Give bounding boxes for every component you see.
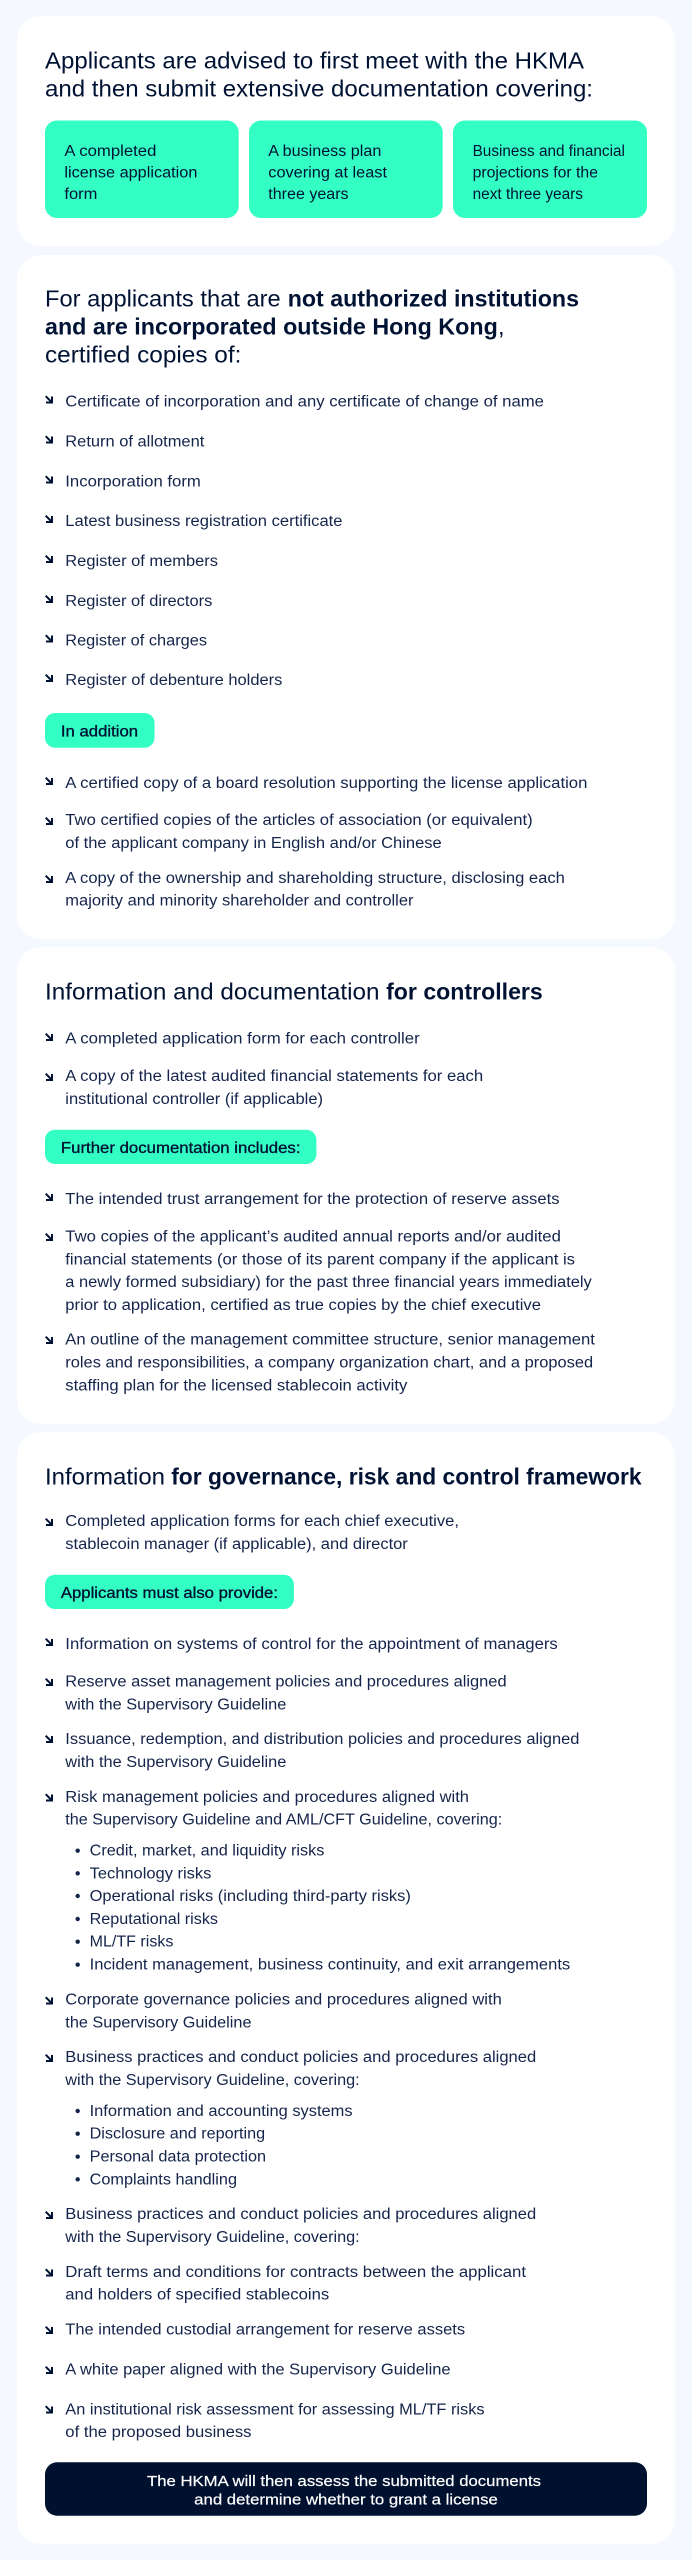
- list: additional documents: [46, 775, 587, 910]
- list: policies and procedures: Reserve asset management policies and procedures aligned: [65, 1674, 507, 1691]
- list: policies and procedures: the Supervisory Guideline and AML/CFT Guideline, covering:: [65, 1812, 502, 1829]
- list: remaining documents: with the Supervisory Guideline, covering:: [64, 2229, 360, 2246]
- panel: applicants incorporated outside Hong Kong: [17, 255, 675, 939]
- list: controller documents: A copy of the latest audited financial statements for each: [65, 1068, 483, 1085]
- list: remaining documents: Business practices and conduct policies and procedures aligned: [65, 2206, 536, 2223]
- panel: controllers: [17, 947, 675, 1424]
- list: certified copies: Register of debenture holders: [65, 672, 283, 689]
- list: further documents: The intended trust arrangement for the protection of reserve assets: [65, 1191, 560, 1208]
- list: further documents: [46, 1191, 596, 1394]
- list: certified copies: Register of directors: [65, 593, 213, 610]
- box: license application form: [45, 120, 239, 218]
- list: policies and procedures: with the Supervisory Guideline: [64, 1696, 286, 1713]
- sub-list: business practice topics: Information and accounting systems: [90, 2103, 353, 2120]
- list: certified copies: Return of allotment: [65, 434, 205, 450]
- heading: overview: and then submit extensive documentation covering:: [45, 75, 593, 101]
- list: governance and conduct policies: the Supervisory Guideline: [65, 2014, 252, 2031]
- box: financial projections: next three years: [473, 186, 583, 203]
- list: certified copies: Latest business registration certificate: [65, 513, 343, 530]
- callout: HKMA assessment: The HKMA will then assess the submitted documents: [147, 2473, 541, 2490]
- sub-list: business practice topics: Personal data protection: [90, 2149, 266, 2166]
- heading: overview: Applicants are advised to first meet with the HKMA: [45, 47, 584, 73]
- list: certified copies: Register of members: [65, 553, 218, 570]
- sub-list: risk types: Incident management, business continuity, and exit arrangements: [90, 1957, 570, 1974]
- list: policies and procedures: [46, 1636, 579, 1829]
- heading: non-authorized applicants: and are incorporated outside Hong Kong: [45, 313, 498, 339]
- pill: further documentation: Further documentation includes:: [61, 1140, 301, 1157]
- heading: controllers: Information and documentation: [45, 978, 380, 1004]
- pill: applicants must also provide: [45, 1575, 294, 1609]
- panel: governance, risk and control framework: [17, 1432, 675, 2544]
- callout: HKMA assessment: and determine whether to grant a license: [194, 2492, 498, 2508]
- list: further documents: roles and responsibilities, a company organization chart, and a proposed: [65, 1355, 593, 1372]
- heading: non-authorized applicants: [45, 285, 579, 367]
- list: application forms: Completed application forms for each chief executive,: [65, 1513, 459, 1530]
- list: controller documents: [46, 1031, 483, 1108]
- list: certified copies: Certificate of incorporation and any certificate of change of name: [65, 394, 544, 410]
- panel: documentation overview: [17, 16, 675, 246]
- list: controller documents: institutional controller (if applicable): [65, 1091, 323, 1108]
- list: governance and conduct policies: [46, 1992, 536, 2089]
- heading: overview: [45, 47, 593, 101]
- sub-list: business practice topics: Complaints handling: [90, 2171, 237, 2188]
- box: financial projections: projections for the: [473, 164, 598, 182]
- sub-list: risk types: [76, 1843, 570, 1974]
- list: further documents: staffing plan for the licensed stablecoin activity: [65, 1377, 408, 1394]
- list: governance and conduct policies: Business practices and conduct policies and procedures aligned: [65, 2049, 536, 2066]
- list: additional documents: of the applicant company in English and/or Chinese: [65, 835, 442, 852]
- list: additional documents: A certified copy of a board resolution supporting the license application: [65, 775, 587, 792]
- heading: governance: Information: [45, 1463, 165, 1489]
- list: further documents: financial statements (or those of its parent company if the applicant is: [65, 1251, 575, 1268]
- pill: in addition: In addition: [61, 724, 138, 740]
- list: remaining documents: Draft terms and conditions for contracts between the applicant: [65, 2264, 527, 2281]
- list: governance and conduct policies: Corporate governance policies and procedures aligned with: [65, 1992, 502, 2009]
- box: license application form: A completed: [64, 143, 156, 160]
- list: certified copies: Incorporation form: [65, 474, 201, 490]
- sub-list: risk types: Technology risks: [90, 1865, 212, 1882]
- heading: controllers: [45, 978, 543, 1004]
- heading: controllers: for controllers: [386, 978, 543, 1004]
- box: financial projections: Business and financial: [473, 143, 625, 160]
- box: business plan: A business plan: [268, 143, 381, 160]
- sub-list: business practice topics: Disclosure and reporting: [90, 2126, 265, 2143]
- sub-list: risk types: Operational risks (including third-party risks): [90, 1888, 411, 1905]
- callout: HKMA assessment: [45, 2462, 647, 2516]
- list: further documents: An outline of the management committee structure, senior management: [65, 1332, 596, 1349]
- list: remaining documents: [46, 2206, 536, 2441]
- list: further documents: Two copies of the applicant’s audited annual reports and/or audited: [65, 1228, 561, 1245]
- box: license application form: license application: [64, 164, 197, 182]
- pill: applicants must also provide: Applicants must also provide:: [61, 1585, 278, 1602]
- list: policies and procedures: Issuance, redemption, and distribution policies and procedures aligned: [65, 1731, 579, 1748]
- box: business plan: [249, 120, 443, 218]
- list: remaining documents: and holders of specified stablecoins: [65, 2287, 329, 2304]
- list: additional documents: Two certified copies of the articles of association (or equivalent): [65, 812, 533, 829]
- list: remaining documents: An institutional risk assessment for assessing ML/TF risks: [65, 2401, 485, 2418]
- list: remaining documents: The intended custodial arrangement for reserve assets: [65, 2322, 465, 2339]
- heading: non-authorized applicants: For applicants that are: [45, 285, 281, 311]
- list: governance and conduct policies: with the Supervisory Guideline, covering:: [64, 2072, 360, 2089]
- sub-list: risk types: Credit, market, and liquidity risks: [90, 1843, 325, 1860]
- list: additional documents: majority and minority shareholder and controller: [65, 893, 414, 910]
- sub-list: risk types: Reputational risks: [90, 1911, 218, 1928]
- sub-list: business practice topics: [76, 2103, 353, 2188]
- list: additional documents: A copy of the ownership and shareholding structure, disclosing each: [65, 870, 565, 887]
- list: controller documents: A completed application form for each controller: [65, 1031, 420, 1048]
- heading: non-authorized applicants: ,: [498, 313, 505, 339]
- box: business plan: covering at least: [268, 164, 388, 182]
- list: policies and procedures: with the Supervisory Guideline: [64, 1754, 286, 1771]
- list: policies and procedures: Information on systems of control for the appointment of managers: [65, 1636, 558, 1653]
- list: remaining documents: A white paper aligned with the Supervisory Guideline: [65, 2362, 451, 2379]
- pill: further documentation: [45, 1130, 316, 1164]
- box: financial projections: [453, 120, 647, 218]
- heading: non-authorized applicants: not authorized institutions: [288, 285, 579, 311]
- box: business plan: three years: [268, 186, 349, 203]
- list: application forms: stablecoin manager (if applicable), and director: [65, 1536, 408, 1553]
- list: certified copies: Register of charges: [65, 632, 207, 650]
- list: certified copies: [46, 394, 544, 689]
- list: further documents: prior to application, certified as true copies by the chief executive: [65, 1297, 541, 1314]
- pill: in addition: [45, 713, 154, 748]
- heading: governance: for governance, risk and control framework: [171, 1463, 642, 1489]
- list: policies and procedures: Risk management policies and procedures aligned with: [65, 1789, 469, 1806]
- list: remaining documents: of the proposed business: [65, 2424, 252, 2441]
- heading: non-authorized applicants: certified copies of:: [45, 341, 241, 367]
- box: license application form: form: [64, 186, 97, 203]
- list: application forms: [46, 1513, 459, 1553]
- sub-list: risk types: ML/TF risks: [90, 1934, 174, 1951]
- list: further documents: a newly formed subsidiary) for the past three financial years immediately: [65, 1274, 592, 1291]
